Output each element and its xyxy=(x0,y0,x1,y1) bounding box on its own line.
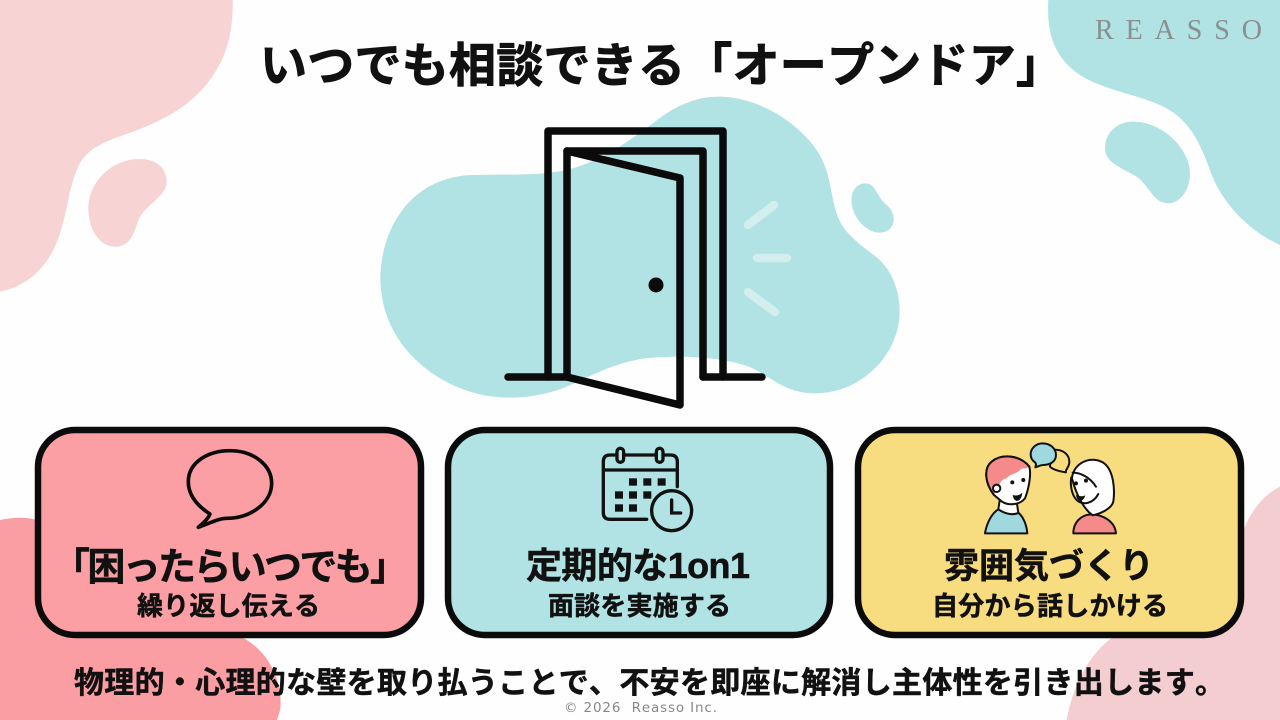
icon: speech bubble xyxy=(188,451,272,527)
blob: top-right teal xyxy=(1048,0,1280,245)
icon: two people talking xyxy=(985,443,1116,533)
summary caption: 物理的・心理的な壁を取り払うことで、不安を即座に解消し主体性を引き出します。 xyxy=(74,667,1225,700)
card background xyxy=(858,430,1241,635)
footer copyright: © 2026 Reasso Inc. xyxy=(564,700,717,716)
subheading: 繰り返し伝える xyxy=(137,591,320,621)
blob: bottom-right pink xyxy=(1067,487,1280,720)
woman xyxy=(1071,460,1116,533)
logo: REASSO: REASSO xyxy=(1095,15,1262,46)
subheading: 自分から話しかける xyxy=(932,591,1168,621)
blob: teal behind door xyxy=(380,97,900,398)
heading: 雰囲気づくり xyxy=(944,547,1154,586)
title: いつでも相談できる「オープンドア」 xyxy=(260,39,1063,92)
door knob xyxy=(648,278,664,292)
man xyxy=(985,456,1030,533)
illustration: open door xyxy=(380,97,900,405)
blob: top-left pink xyxy=(0,0,233,292)
blob: bottom-left pink xyxy=(0,518,281,720)
light rays xyxy=(748,205,787,312)
heading: 定期的な1on1 xyxy=(526,545,750,586)
panel: always available xyxy=(38,430,421,635)
card background xyxy=(448,430,830,635)
blob: small teal xyxy=(1105,122,1190,203)
blob: small teal by door xyxy=(851,183,894,233)
subheading: 面談を実施する xyxy=(548,591,731,621)
icon: calendar and clock xyxy=(603,448,692,531)
panel: regular 1on1 xyxy=(448,430,830,635)
heading: 「困ったらいつでも」 xyxy=(52,547,408,589)
door frame and floor xyxy=(508,131,762,405)
card background xyxy=(38,430,421,635)
speech bubbles xyxy=(1031,443,1069,472)
blob: small pink xyxy=(88,159,167,247)
panel: atmosphere xyxy=(858,430,1241,635)
